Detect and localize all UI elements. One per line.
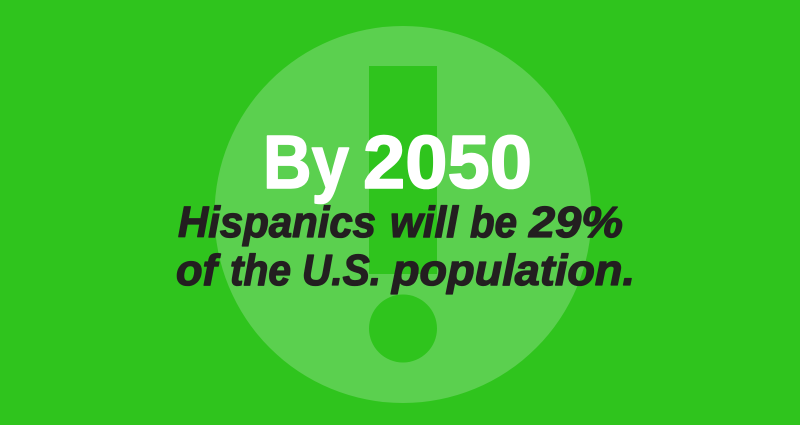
headline: By 2050: By (263, 120, 349, 204)
statement text: 29% (528, 198, 623, 247)
statement text: be (470, 198, 517, 247)
icon: exclamation mark in circle (214, 26, 592, 403)
statement text: of (176, 246, 221, 295)
statement text: will (390, 198, 459, 247)
headline: By 2050: 2050 (363, 120, 532, 204)
statement text: population. (391, 246, 635, 295)
statement text: Hispanics (178, 198, 376, 247)
statement text (176, 198, 635, 295)
headline: By 2050 (263, 120, 532, 204)
statement text: U.S. (302, 246, 381, 295)
statement text: the (230, 246, 291, 295)
